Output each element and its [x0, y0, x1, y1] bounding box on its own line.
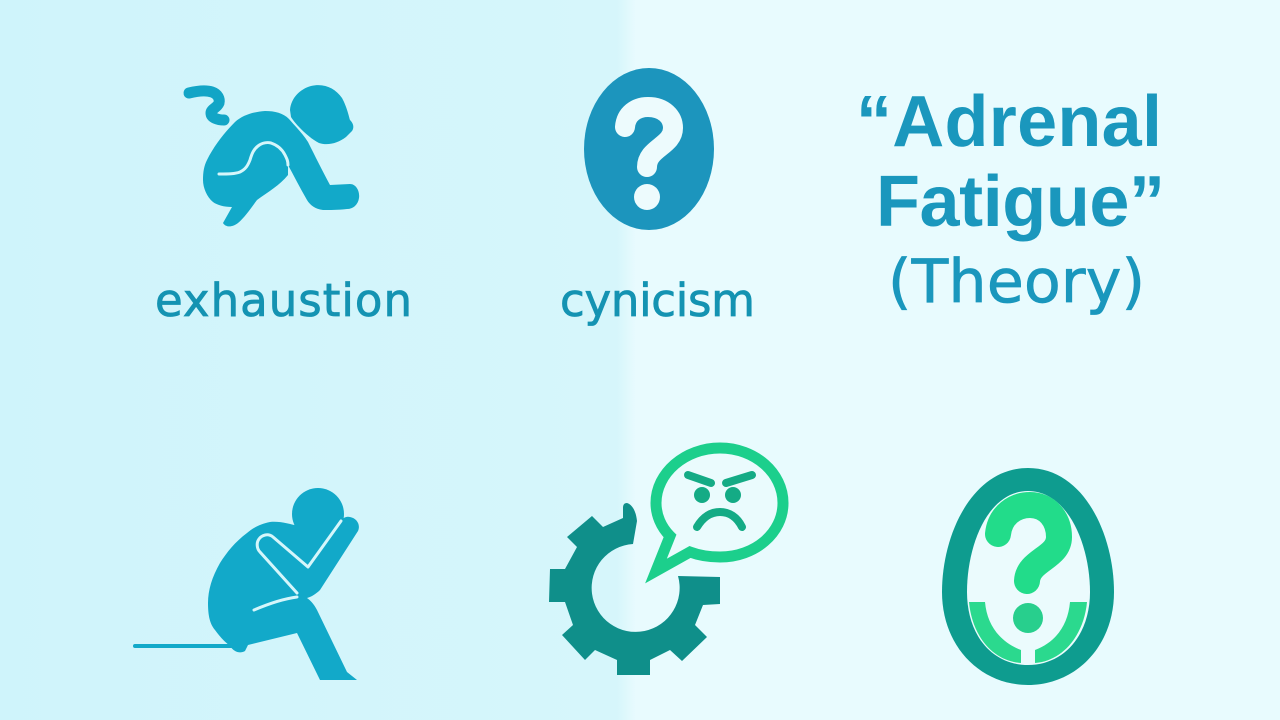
- icon: broken gear: [549, 503, 720, 675]
- heading: Adrenal Fatigue (Theory): (Theory): [888, 247, 1145, 317]
- heading: Adrenal Fatigue (Theory): [856, 82, 1165, 317]
- icon: angry speech bubble: [656, 448, 783, 571]
- icon: exhausted crouching person: [189, 85, 359, 226]
- icon: question mark oval: [584, 68, 714, 230]
- label: cynicism: cynicism: [560, 274, 755, 327]
- label: exhaustion: exhaustion: [155, 274, 412, 327]
- left background panel: [0, 0, 636, 720]
- heading: Adrenal Fatigue (Theory): Fatigue”: [876, 162, 1165, 242]
- heading: Adrenal Fatigue (Theory): “Adrenal: [856, 82, 1162, 162]
- icon: egg with green question mark: [942, 468, 1114, 685]
- icon: person sitting with head in hands: [133, 488, 359, 680]
